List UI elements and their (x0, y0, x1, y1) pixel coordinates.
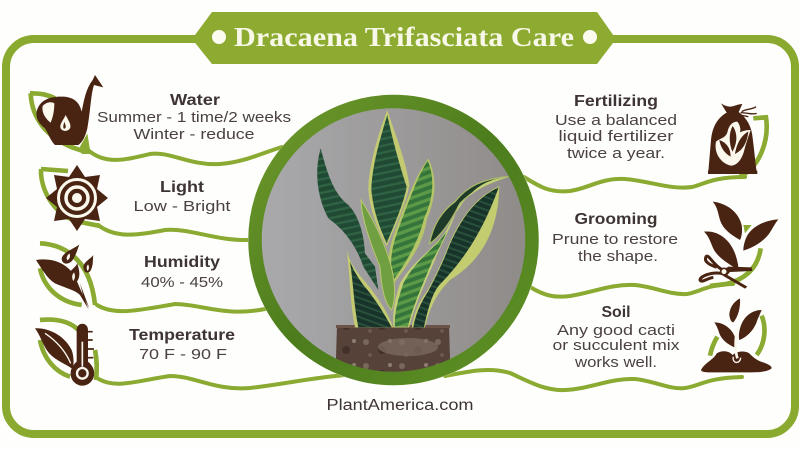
text: the shape. (578, 248, 658, 265)
snake plant (317, 110, 508, 327)
ring (255, 102, 532, 378)
text: Summer - 1 time/2 weeks (97, 109, 291, 126)
heading: Fertilizing (574, 93, 658, 110)
title banner (192, 12, 616, 64)
text: liquid fertilizer (558, 128, 674, 145)
panel: water (30, 75, 291, 154)
panel: grooming (552, 202, 778, 289)
heading: Soil (602, 304, 630, 321)
pot (336, 325, 450, 372)
icon: leaf and thermometer (35, 320, 97, 386)
panel: soil (552, 298, 772, 372)
text: Prune to restore (552, 231, 678, 248)
heading: Temperature (129, 327, 235, 344)
text: 40% - 45% (141, 274, 223, 291)
icon: watering can (30, 75, 103, 154)
title banner: Dracaena Trifasciata Care (234, 22, 574, 52)
text: works well. (574, 354, 657, 371)
heading: Humidity (144, 254, 220, 271)
plant photo circle (248, 94, 539, 390)
icon: fertilizer bag (708, 103, 767, 177)
source credit: PlantAmerica.com (326, 397, 474, 414)
wavy connectors (88, 147, 745, 390)
icon: sun (41, 165, 108, 231)
heading: Light (160, 179, 205, 196)
icon: leaf and drops (36, 243, 95, 309)
icon: pruning shears and leaves (700, 202, 778, 289)
panel: fertilizing (555, 93, 767, 177)
text: Any good cacti (557, 322, 675, 339)
icon: plant in soil (701, 298, 772, 372)
text: Low - Bright (134, 198, 231, 215)
text: 70 F - 90 F (139, 346, 227, 363)
text: twice a year. (567, 145, 665, 162)
panel: humidity (36, 243, 223, 309)
text: or succulent mix (552, 337, 680, 354)
text: Use a balanced (555, 112, 677, 129)
heading: Grooming (574, 211, 658, 228)
text: Winter - reduce (134, 126, 254, 143)
panel: temperature (35, 320, 235, 386)
heading: Water (170, 92, 220, 109)
panel: light (41, 165, 231, 231)
